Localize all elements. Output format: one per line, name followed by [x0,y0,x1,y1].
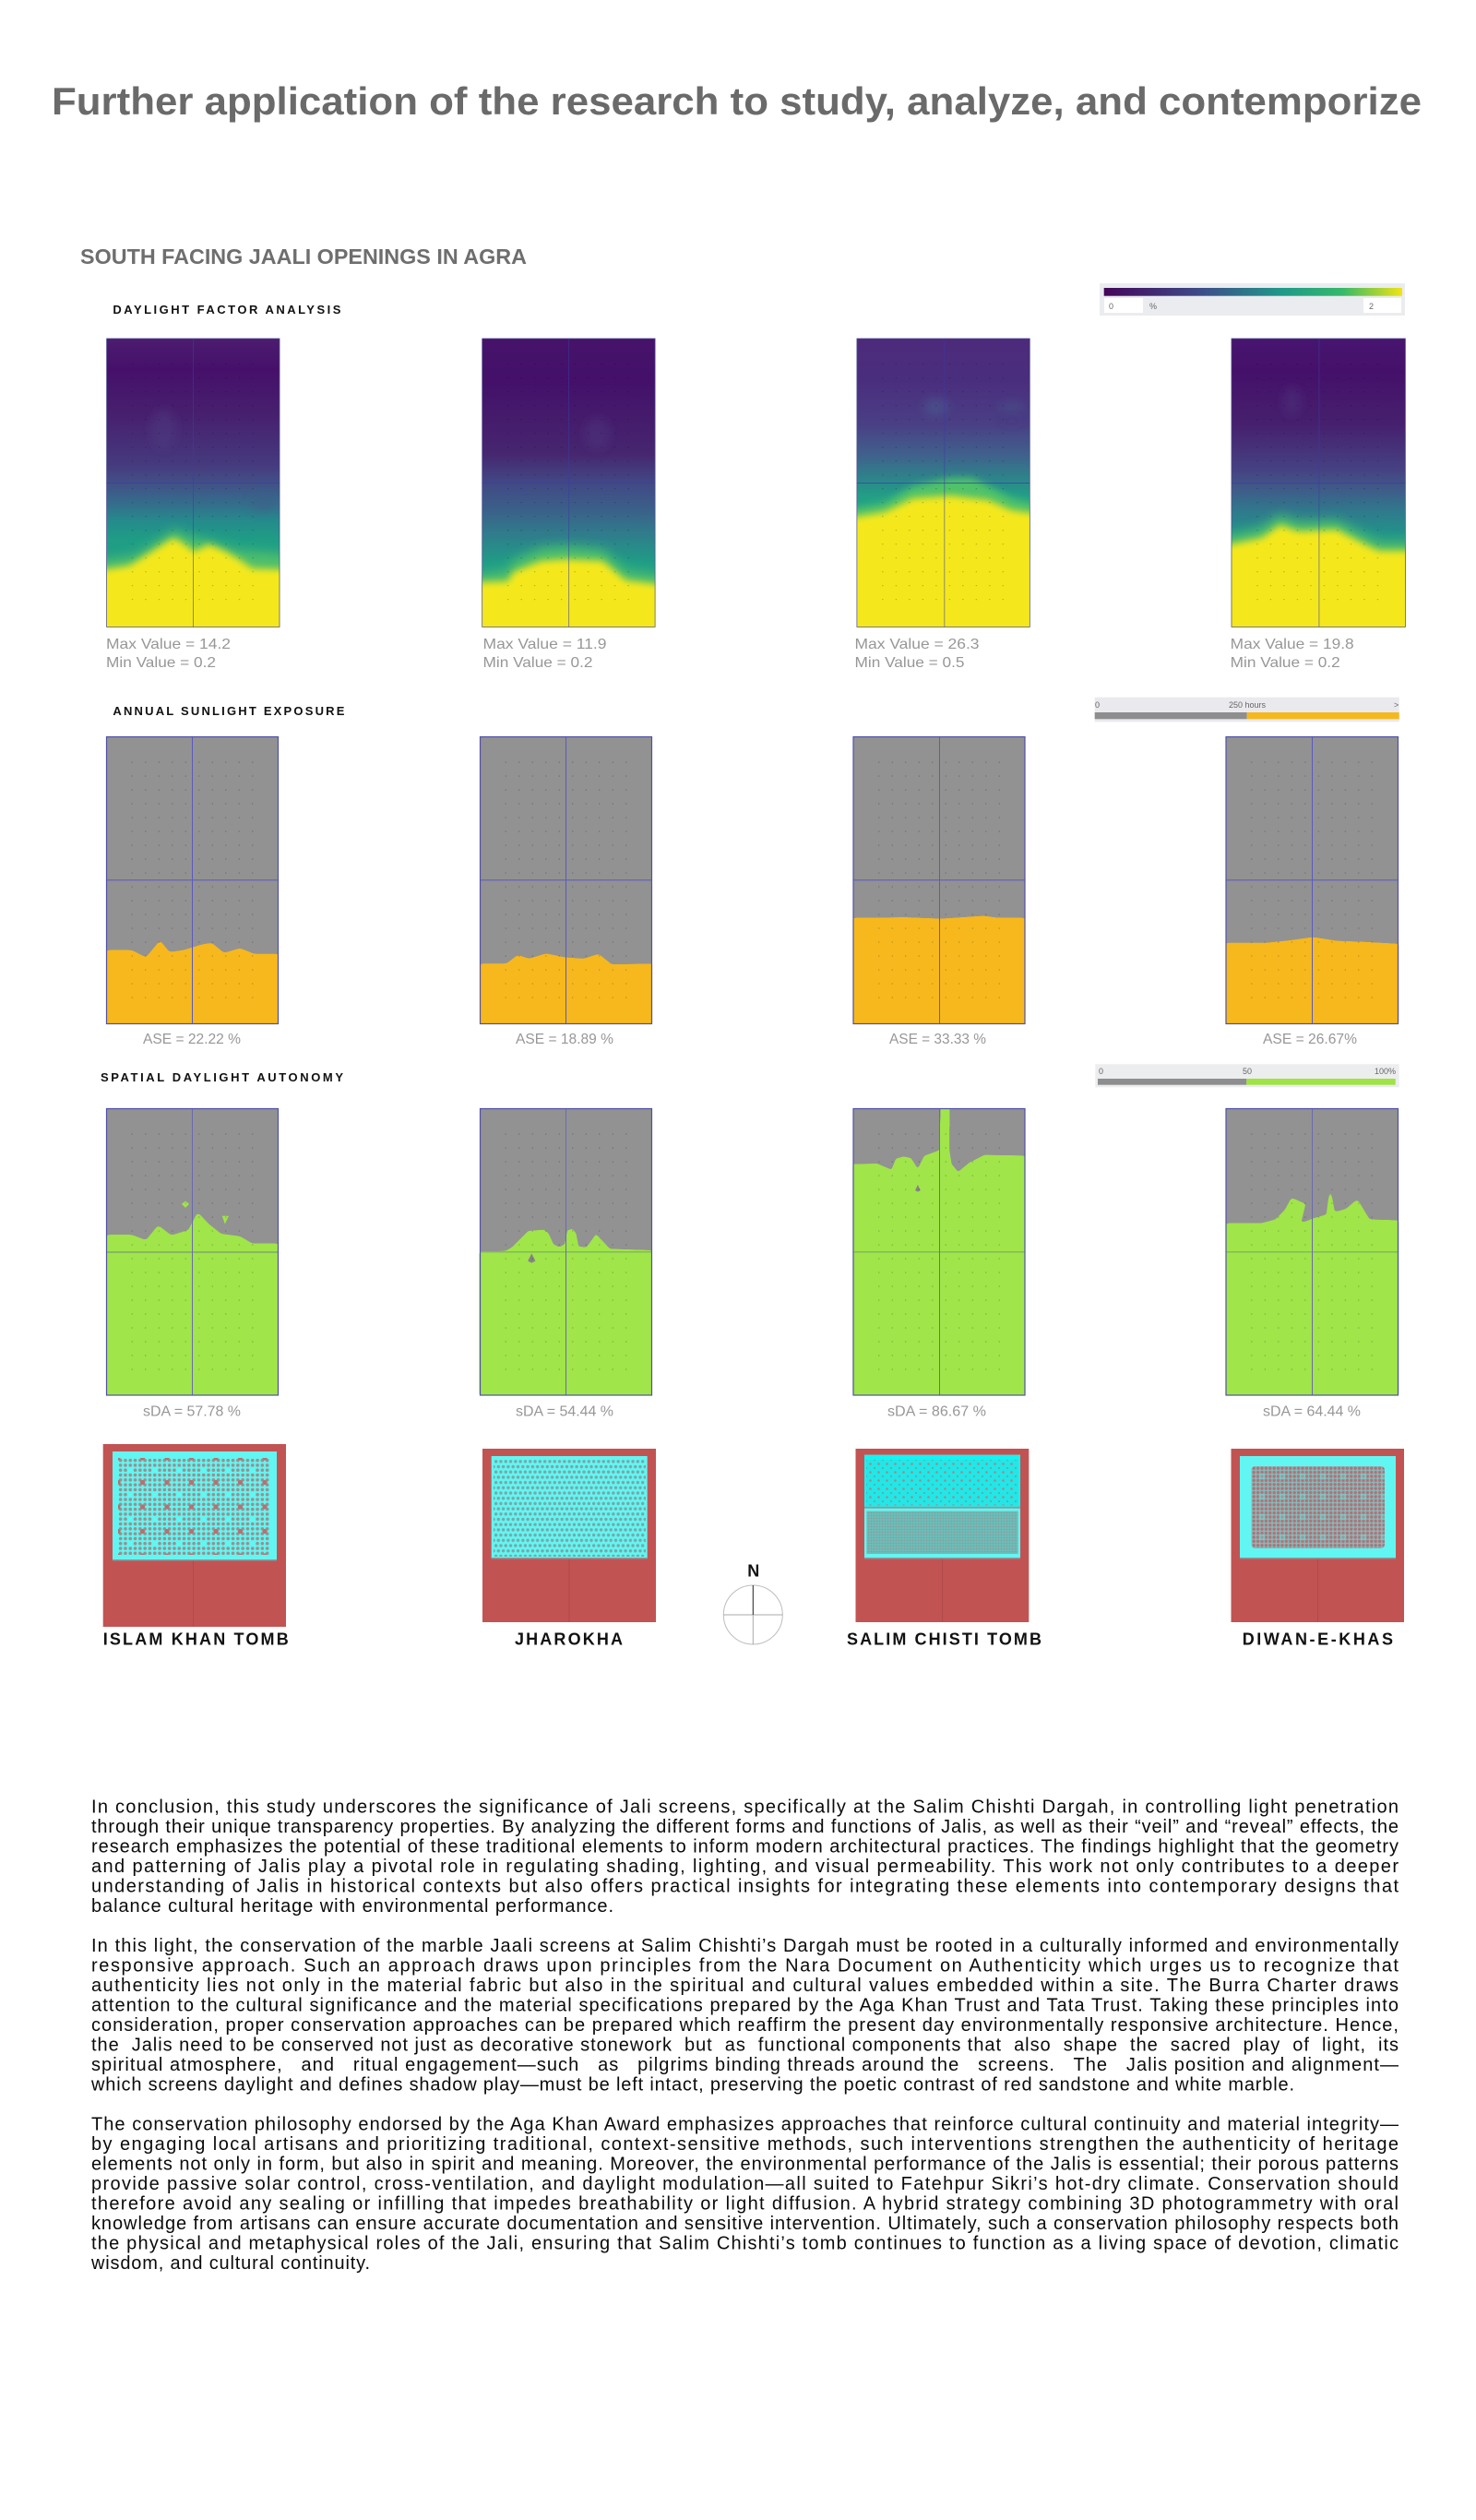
text block: conclusion paragraph 3: elements not only in form, but also in spirit and meaning. Moreover, the environmental performance of the Jalis is essential; their porous patterns [91,2154,1399,2174]
text block: conclusion paragraph 1: understanding of Jalis in historical contexts but also offers practical insights for integrating these elements into contemporary designs that [91,1877,1399,1897]
value: ASE islam khan tomb: ASE = 22.22 % [143,1032,241,1047]
text block: conclusion paragraph 1 [91,1797,1399,1917]
icon: north compass: N [747,1561,759,1580]
values: daylight factor, salim chisti tomb: Min Value = 0.5 [854,655,965,671]
text block: conclusion paragraph 1: and patterning of Jalis play a pivotal role in regulating shading, lighting, and visual permeability. This work not only contributes to a deeper [91,1857,1399,1877]
legend: daylight factor colour scale: % [1149,302,1157,311]
value: sDA islam khan tomb: sDA = 57.78 % [143,1404,241,1419]
values: daylight factor, diwan-e-khas: Min Value = 0.2 [1231,655,1340,671]
legend: annual sunlight exposure scale: 0 [1095,700,1100,710]
panel: jaali elevation, diwan-e-khas [1231,1449,1404,1622]
value: ASE salim chisti tomb: ASE = 33.33 % [889,1032,986,1047]
title: Further application of the research to study, analyze, and contemporize [52,79,1422,123]
legend: spatial daylight autonomy scale [1095,1064,1399,1087]
panel: spatial daylight autonomy, islam khan tomb [106,1108,279,1395]
values: daylight factor, jharokha: Min Value = 0.2 [483,655,593,671]
values: daylight factor, diwan-e-khas: Max Value = 19.8 [1231,637,1354,652]
legend: spatial daylight autonomy scale: 100% [1375,1067,1396,1076]
text block: conclusion paragraph 2: which screens daylight and defines shadow play—must be left intact, preserving the poetic contrast of red sandstone and white marble. [90,2075,1294,2096]
text block: conclusion paragraph 1: balance cultural heritage with environmental performance. [91,1896,613,1917]
legend: spatial daylight autonomy scale: 50 [1243,1067,1252,1076]
text block: conclusion paragraph 3: wisdom, and cultural continuity. [90,2253,370,2274]
section heading: south facing jaali openings: SOUTH FACING JAALI OPENINGS IN AGRA [80,245,527,269]
legend: annual sunlight exposure scale: 250 hours [1229,700,1267,710]
text block: conclusion paragraph 1: research emphasizes the potential of these traditional elements to inform modern architectural practices. The findings highlight that the geometry [91,1837,1399,1857]
panel: annual sunlight exposure, salim chisti tomb [852,736,1026,1024]
label: islam khan tomb: ISLAM KHAN TOMB [103,1630,289,1649]
legend: daylight factor colour scale [1100,283,1405,316]
text block: conclusion paragraph 2: authenticity lies not only in the material fabric but also in the spiritual and cultural values embedded within a site. The Burra Charter draws [91,1976,1399,1996]
text block: conclusion paragraph 2: consideration, proper conservation approaches can be prepared which reaffirm the present day environmentally responsive architecture. Hence, [91,2015,1399,2036]
text block: conclusion paragraph 3: the physical and metaphysical roles of the Jali, ensuring that Salim Chishti’s tomb continues to function as a living space of devotion, climatic [91,2234,1399,2254]
legend: annual sunlight exposure scale [1095,698,1399,722]
panel: jaali elevation, salim chisti tomb [856,1449,1029,1622]
heading: annual sunlight exposure: ANNUAL SUNLIGHT EXPOSURE [113,704,345,718]
text block: conclusion paragraph 1: through their unique transparency properties. By analyzing the different forms and functions of Jalis, as well as their “veil” and “reveal” effects, the [91,1817,1399,1837]
value: ASE jharokha: ASE = 18.89 % [516,1032,613,1047]
panel: annual sunlight exposure, diwan-e-khas [1226,736,1399,1024]
text block: conclusion paragraph 3: provide passive solar control, cross-ventilation, and daylight modulation—all suited to Fatehpur Sikri’s hot-dry climate. Conservation should [91,2174,1399,2194]
text block: conclusion paragraph 2: spiritual atmosphere, and ritual engagement—such as pilgrims binding threads around the screens. The Jalis position and alignment— [91,2055,1399,2075]
panel: daylight factor, jharokha [482,338,655,627]
text block: conclusion paragraph 2: the Jalis need to be conserved not just as decorative stonework but as functional components that also shape the sacred play of light, its [91,2036,1399,2056]
values: daylight factor, jharokha [483,637,607,671]
legend: annual sunlight exposure scale: > [1394,700,1399,710]
text block: conclusion paragraph 2: In this light, the conservation of the marble Jaali screens at Salim Chishti’s Dargah must be rooted in a culturally informed and environmentally [91,1936,1399,1956]
label: salim chisti tomb: SALIM CHISTI TOMB [847,1630,1042,1649]
text block: conclusion paragraph 2 [90,1936,1399,2096]
value: sDA jharokha: sDA = 54.44 % [516,1404,613,1419]
label: jharokha: JHAROKHA [515,1630,623,1649]
panel: spatial daylight autonomy, diwan-e-khas [1226,1108,1399,1395]
values: daylight factor, salim chisti tomb [854,637,980,671]
panel: jaali elevation, islam khan tomb [103,1444,286,1627]
values: daylight factor, islam khan tomb: Min Value = 0.2 [106,655,216,671]
panel: spatial daylight autonomy, jharokha [480,1108,652,1395]
legend: daylight factor colour scale: 2 [1369,302,1374,311]
icon: north compass [723,1561,782,1644]
panel: annual sunlight exposure, jharokha [480,736,652,1024]
text block: conclusion paragraph 3: therefore avoid any sealing or infilling that impedes breathability or light diffusion. A hybrid strategy combining 3D photogrammetry with oral [91,2194,1399,2215]
values: daylight factor, salim chisti tomb: Max Value = 26.3 [854,637,980,652]
panel: jaali elevation, jharokha [482,1449,656,1622]
text block: conclusion paragraph 2: attention to the cultural significance and the material specifications prepared by the Aga Khan Trust and Tata Trust. Taking these principles into [91,1995,1399,2015]
text block: conclusion paragraph 3 [90,2115,1399,2274]
values: daylight factor, islam khan tomb [106,637,231,671]
panel: daylight factor, salim chisti tomb [856,338,1030,627]
legend: spatial daylight autonomy scale: 0 [1099,1067,1103,1076]
value: ASE diwan-e-khas: ASE = 26.67% [1263,1032,1357,1047]
heading: spatial daylight autonomy: SPATIAL DAYLIGHT AUTONOMY [101,1070,343,1084]
label: diwan-e-khas: DIWAN-E-KHAS [1243,1630,1393,1649]
value: sDA salim chisti tomb: sDA = 86.67 % [887,1404,986,1419]
panel: daylight factor, diwan-e-khas [1231,338,1406,627]
values: daylight factor, diwan-e-khas [1231,637,1354,671]
legend: daylight factor colour scale: 0 [1109,302,1113,311]
text block: conclusion paragraph 3: knowledge from artisans can ensure accurate documentation and sensitive intervention. Ultimately, such a conservation philosophy respects both [91,2214,1399,2234]
text block: conclusion paragraph 2: responsive approach. Such an approach draws upon principles from the Nara Document on Authenticity which urges us to recognize that [91,1956,1399,1977]
text block: conclusion paragraph 3: The conservation philosophy endorsed by the Aga Khan Award emphasizes approaches that reinforce cultural continuity and material integrity— [91,2115,1399,2135]
panel: spatial daylight autonomy, salim chisti tomb [852,1108,1026,1395]
heading: daylight factor analysis: DAYLIGHT FACTOR ANALYSIS [113,303,341,316]
value: sDA diwan-e-khas: sDA = 64.44 % [1263,1404,1361,1419]
text block: conclusion paragraph 3: by engaging local artisans and prioritizing traditional, context-sensitive methods, such interventions strengthen the authenticity of heritage [91,2134,1399,2155]
values: daylight factor, islam khan tomb: Max Value = 14.2 [106,637,231,652]
panel: annual sunlight exposure, islam khan tomb [106,736,279,1024]
values: daylight factor, jharokha: Max Value = 11.9 [483,637,607,652]
panel: daylight factor, islam khan tomb [106,338,280,627]
text block: conclusion paragraph 1: In conclusion, this study underscores the significance of Jali screens, specifically at the Salim Chishti Dargah, in controlling light penetration [91,1797,1399,1818]
